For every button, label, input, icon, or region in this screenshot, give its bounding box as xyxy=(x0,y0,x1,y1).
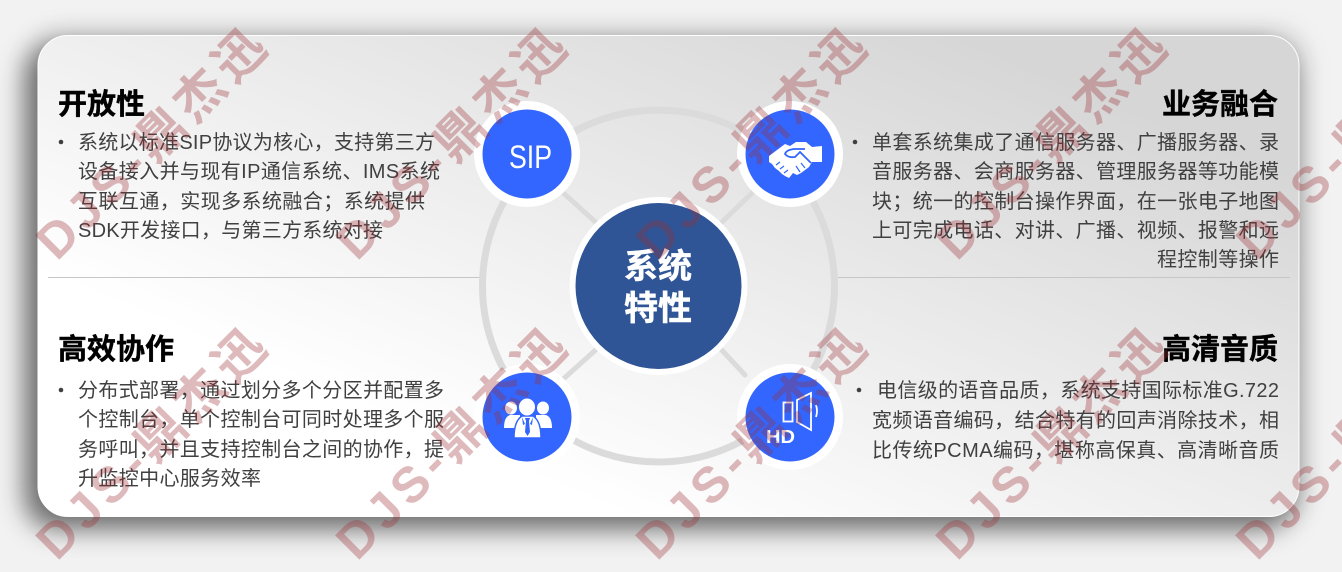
divider left xyxy=(48,277,480,278)
text block: audio quality xyxy=(857,333,1279,462)
text block: collaboration: 升监控中心服务效率 xyxy=(78,467,261,490)
icon: handshake xyxy=(737,101,843,207)
icon: SIP xyxy=(474,101,580,207)
watermarks: DJS-鼎杰迅 xyxy=(325,318,577,570)
icon: HD speaker: HD xyxy=(766,427,795,447)
text block: integration: 块；统一的控制台操作界面，在一张电子地图 xyxy=(872,190,1279,213)
text block: collaboration xyxy=(58,333,444,490)
text block: integration xyxy=(853,88,1279,271)
watermarks: DJS-鼎杰迅 xyxy=(25,18,277,270)
text block: audio quality: 宽频语音编码，结合特有的回声消除技术，相 xyxy=(872,409,1279,432)
text block: integration: 上可完成电话、对讲、广播、视频、报警和远 xyxy=(872,219,1279,242)
text block: integration: 单套系统集成了通信服务器、广播服务器、录 xyxy=(872,131,1279,154)
text block: open: 设备接入并与现有IP通信系统、IMS系统 xyxy=(78,160,440,183)
spokes xyxy=(560,190,755,382)
text block: collaboration: 个控制台，单个控制台可同时处理多个服 xyxy=(78,408,444,431)
text block: open: SDK开发接口，与第三方系统对接 xyxy=(78,219,383,242)
watermarks: DJS-鼎杰迅 xyxy=(25,318,277,570)
center circle: 系统 xyxy=(624,248,692,286)
text block: integration: 程控制等操作 xyxy=(1157,248,1279,271)
diagram: system characteristics hub xyxy=(474,101,843,470)
divider right xyxy=(838,277,1290,278)
heading: 开放性 xyxy=(58,88,145,121)
watermarks: DJS-鼎杰迅 xyxy=(325,18,577,270)
watermarks: DJS-鼎杰迅 xyxy=(625,318,877,570)
text block: audio quality: 电信级的语音品质，系统支持国际标准G.722 xyxy=(877,379,1279,402)
text block: open xyxy=(58,88,440,242)
text block: open: 系统以标准SIP协议为核心，支持第三方 xyxy=(78,131,435,154)
icon: SIP: SIP xyxy=(509,139,552,175)
center circle: 特性 xyxy=(624,290,692,328)
text block: collaboration: 务呼叫，并且支持控制台之间的协作，提 xyxy=(78,438,444,461)
text block: audio quality: 比传统PCMA编码，堪称高保真、高清晰音质 xyxy=(872,439,1279,462)
text block: open: 互联互通，实现多系统融合；系统提供 xyxy=(78,190,425,213)
heading: 高清音质 xyxy=(1162,333,1278,366)
outer ring xyxy=(482,110,834,462)
icon: team xyxy=(474,364,580,470)
watermarks: DJS-鼎杰迅 xyxy=(925,318,1177,570)
heading: 业务融合 xyxy=(1162,88,1278,121)
watermarks: DJS-鼎杰迅 xyxy=(625,18,877,270)
heading: 高效协作 xyxy=(58,333,174,366)
text block: integration: 音服务器、会商服务器、管理服务器等功能模 xyxy=(872,160,1279,183)
watermarks: DJS-鼎杰迅 xyxy=(925,18,1177,270)
text block: collaboration: 分布式部署，通过划分多个分区并配置多 xyxy=(78,379,444,402)
icon: HD speaker xyxy=(737,364,843,470)
center circle xyxy=(570,197,748,375)
